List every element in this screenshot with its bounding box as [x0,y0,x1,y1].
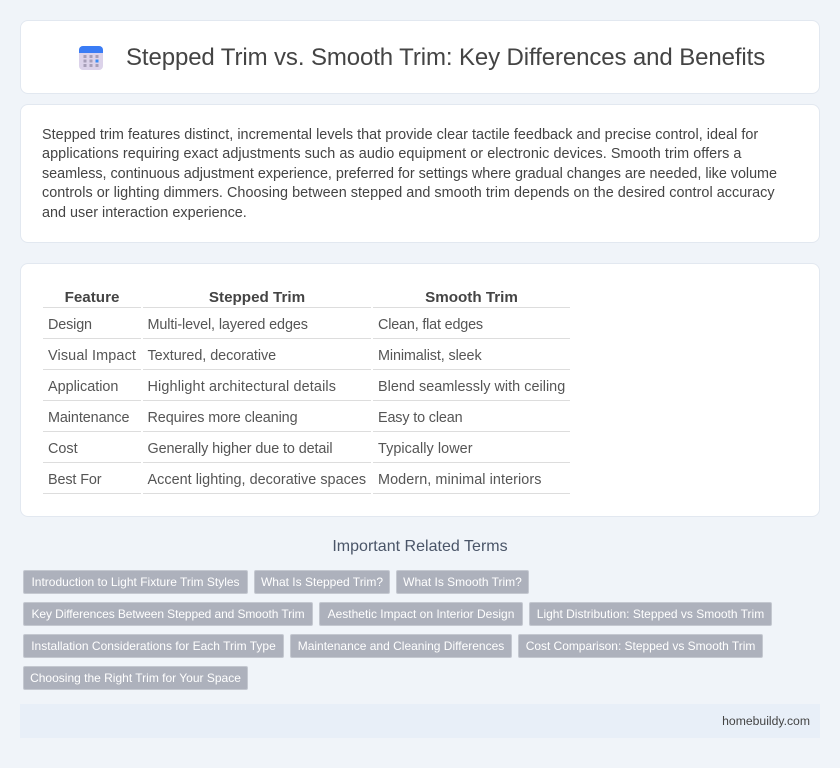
comparison table: Stepped Trim [209,289,305,306]
related term tags: Maintenance and Cleaning Differences [298,639,504,653]
comparison table: Modern, minimal interiors [378,472,542,488]
related term tags: What Is Stepped Trim? [261,575,383,589]
panel: title card [20,20,820,94]
footer source text: homebuildy.com [722,714,810,728]
comparison table: Typically lower [378,441,473,457]
comparison table: Generally higher due to detail [148,441,332,457]
comparison table: Design [48,317,92,333]
related term tags: Key Differences Between Stepped and Smooth Trim [31,607,305,621]
related term tags: What Is Smooth Trim? [403,575,522,589]
intro text: and user interaction experience. [42,205,247,221]
comparison table: Textured, decorative [148,348,276,364]
related term tags: Installation Considerations for Each Trim Type [31,639,276,653]
comparison table: Blend seamlessly with ceiling [378,379,565,395]
related term tags: Choosing the Right Trim for Your Space [30,671,241,685]
comparison table: Cost [48,441,78,457]
related term tags [23,570,772,690]
intro text: Stepped trim features distinct, incremental levels that provide clear tactile feedback and precise control, ideal for [42,127,758,143]
intro text [42,127,777,221]
related term tags: Aesthetic Impact on Interior Design [328,607,514,621]
heading: related terms: Important Related Terms [332,538,508,555]
comparison table: Requires more cleaning [148,410,298,426]
title: Stepped Trim vs. Smooth Trim: Key Differences and Benefits [126,44,765,71]
comparison table: Smooth Trim [425,289,518,306]
footer bar [20,704,820,738]
icon: calendar [79,46,103,70]
comparison table: Multi-level, layered edges [148,317,308,333]
comparison table: Best For [48,472,101,488]
comparison table: Highlight architectural details [148,379,336,395]
panel: comparison table card [20,263,820,517]
related term tags: Cost Comparison: Stepped vs Smooth Trim [526,639,755,653]
comparison table: Maintenance [48,410,129,426]
intro text: applications requiring exact adjustments such as audio equipment or electronic devices. Smooth trim offers a [42,146,741,162]
comparison table: Clean, flat edges [378,317,483,333]
comparison table: Minimalist, sleek [378,348,482,364]
panel: intro text card [20,104,820,243]
intro text: controls or lighting dimmers. Choosing between stepped and smooth trim depends on the desired control accuracy [42,185,775,201]
comparison table [43,289,570,494]
comparison table: Application [48,379,118,395]
related term tags: Light Distribution: Stepped vs Smooth Trim [537,607,764,621]
comparison table: Accent lighting, decorative spaces [148,472,366,488]
related term tags: Introduction to Light Fixture Trim Styles [31,575,240,589]
comparison table: Visual Impact [48,348,136,364]
comparison table: Feature [65,289,119,306]
comparison table: Easy to clean [378,410,462,426]
intro text: seamless, continuous adjustment experience, preferred for settings where gradual changes are needed, like volume [42,166,777,182]
